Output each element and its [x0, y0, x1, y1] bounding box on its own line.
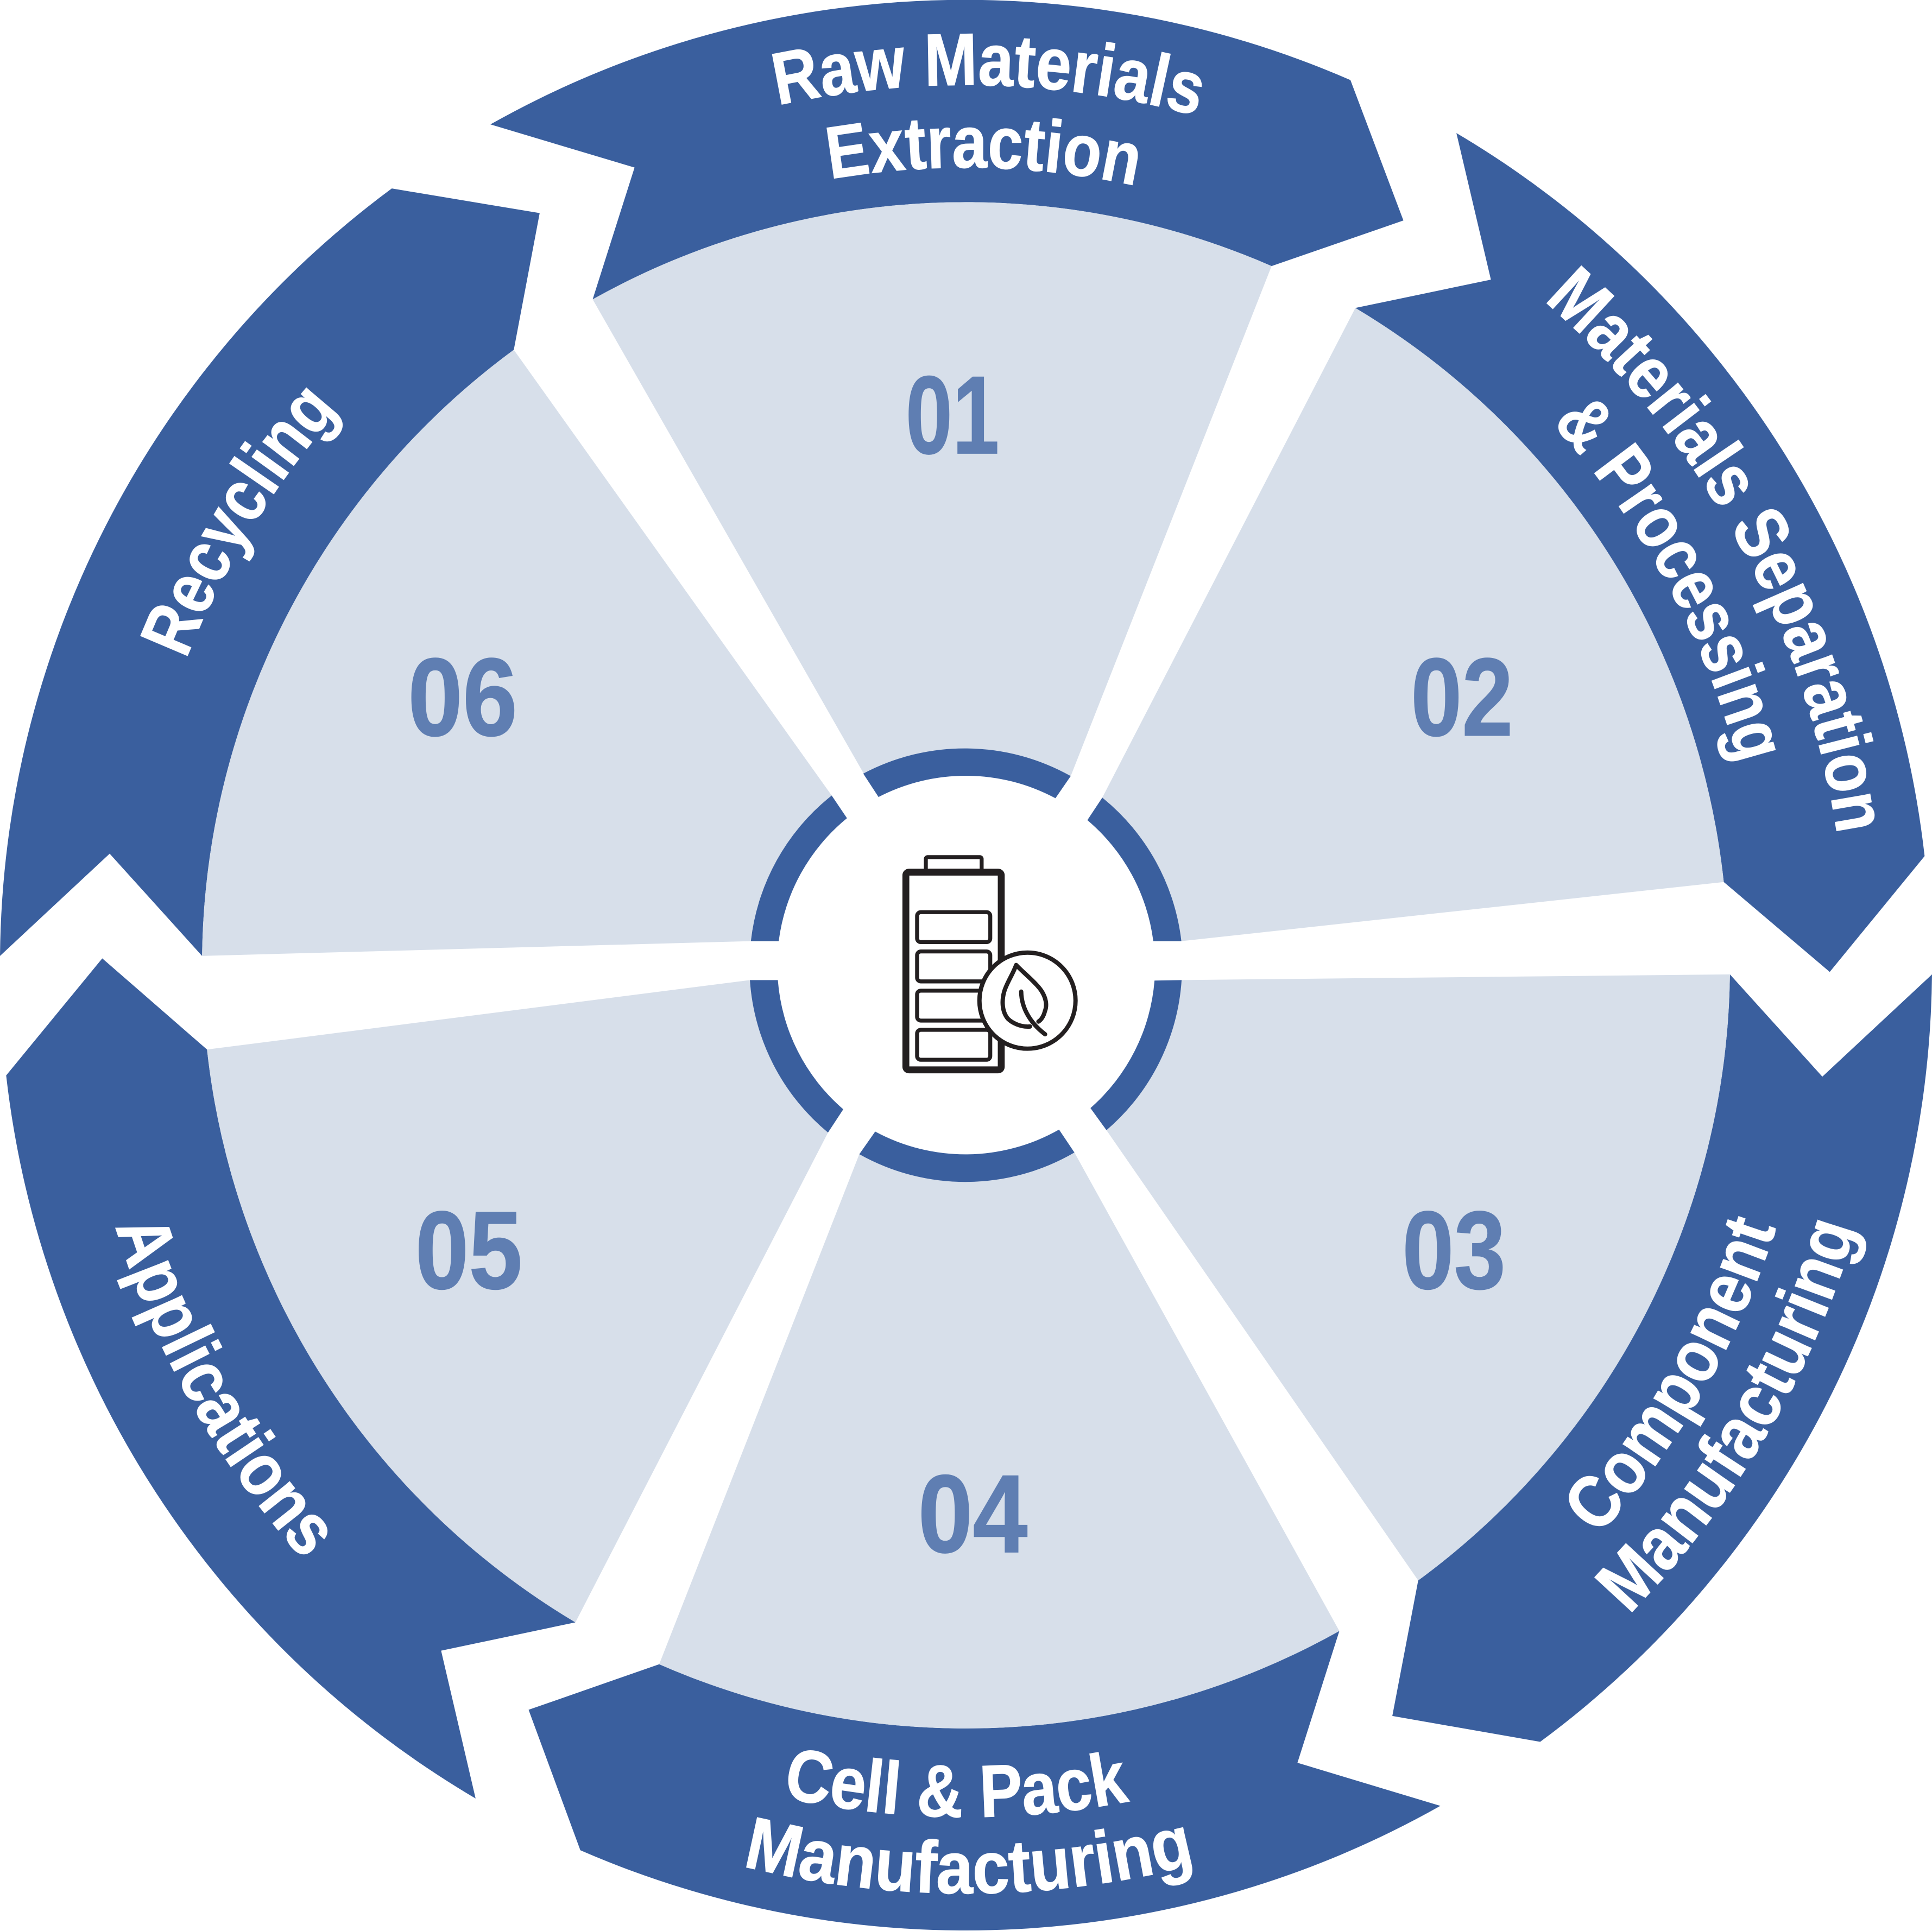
arrow band 05 [6, 958, 576, 1799]
leaf badge circle [980, 953, 1076, 1049]
panel: step 06 recycling [0, 188, 847, 956]
wedge 03 [1107, 974, 1730, 1580]
number 04: 04 [918, 1452, 1027, 1576]
number 02: 02 [1411, 636, 1513, 759]
wedge 05 [207, 980, 828, 1622]
panel: step 03 component manufacturing [1090, 974, 1932, 1742]
ring segment 06 [751, 795, 847, 941]
ring segment 02 [1088, 797, 1182, 941]
label: Extraction: Extraction [826, 118, 1138, 186]
wedge 06 [202, 350, 832, 956]
wedge 04 [659, 1153, 1340, 1729]
arrow band 02 [1355, 133, 1924, 972]
arrow band 03 [1392, 974, 1932, 1742]
label: Manufacturing: Manufacturing [1594, 1219, 1866, 1612]
ring segment 01 [863, 749, 1071, 798]
label: Raw Materials: Raw Materials [772, 34, 1202, 113]
panel: step 05 applications [6, 958, 843, 1799]
ring segment 05 [750, 980, 843, 1132]
panel: step 01 raw materials extraction [490, 0, 1403, 798]
panel: step 02 materials separation and processing [1087, 133, 1924, 972]
ring segment 04 [859, 1130, 1075, 1182]
icon: battery with leaf [906, 857, 1076, 1070]
label: Manufacturing: Manufacturing [746, 1817, 1192, 1895]
battery cells [917, 912, 990, 1060]
battery terminal [926, 857, 982, 871]
wedge 02 [1102, 308, 1724, 941]
number 01: 01 [906, 353, 999, 477]
leaf outline [1003, 965, 1046, 1027]
panel: step 04 cell and pack manufacturing [529, 1129, 1440, 1930]
label: Materials Separation: Materials Separation [1546, 265, 1874, 832]
number 03: 03 [1402, 1189, 1506, 1313]
label: Applications: Applications [115, 1227, 328, 1555]
arrow band 06 [0, 188, 540, 956]
arrow band 04 [528, 1631, 1441, 1930]
label: Cell & Pack: Cell & Pack [788, 1750, 1131, 1818]
wedge 01 [592, 202, 1272, 776]
number 05: 05 [415, 1189, 522, 1313]
number 06: 06 [408, 636, 517, 759]
leaf stem [1021, 992, 1045, 1034]
label: Recycling: Recycling [140, 388, 343, 656]
ring segment 03 [1090, 980, 1182, 1130]
battery body [906, 872, 1001, 1070]
label: & Processing: & Processing [1558, 401, 1776, 761]
label: Component: Component [1569, 1216, 1776, 1527]
arrow band 01 [490, 0, 1404, 299]
